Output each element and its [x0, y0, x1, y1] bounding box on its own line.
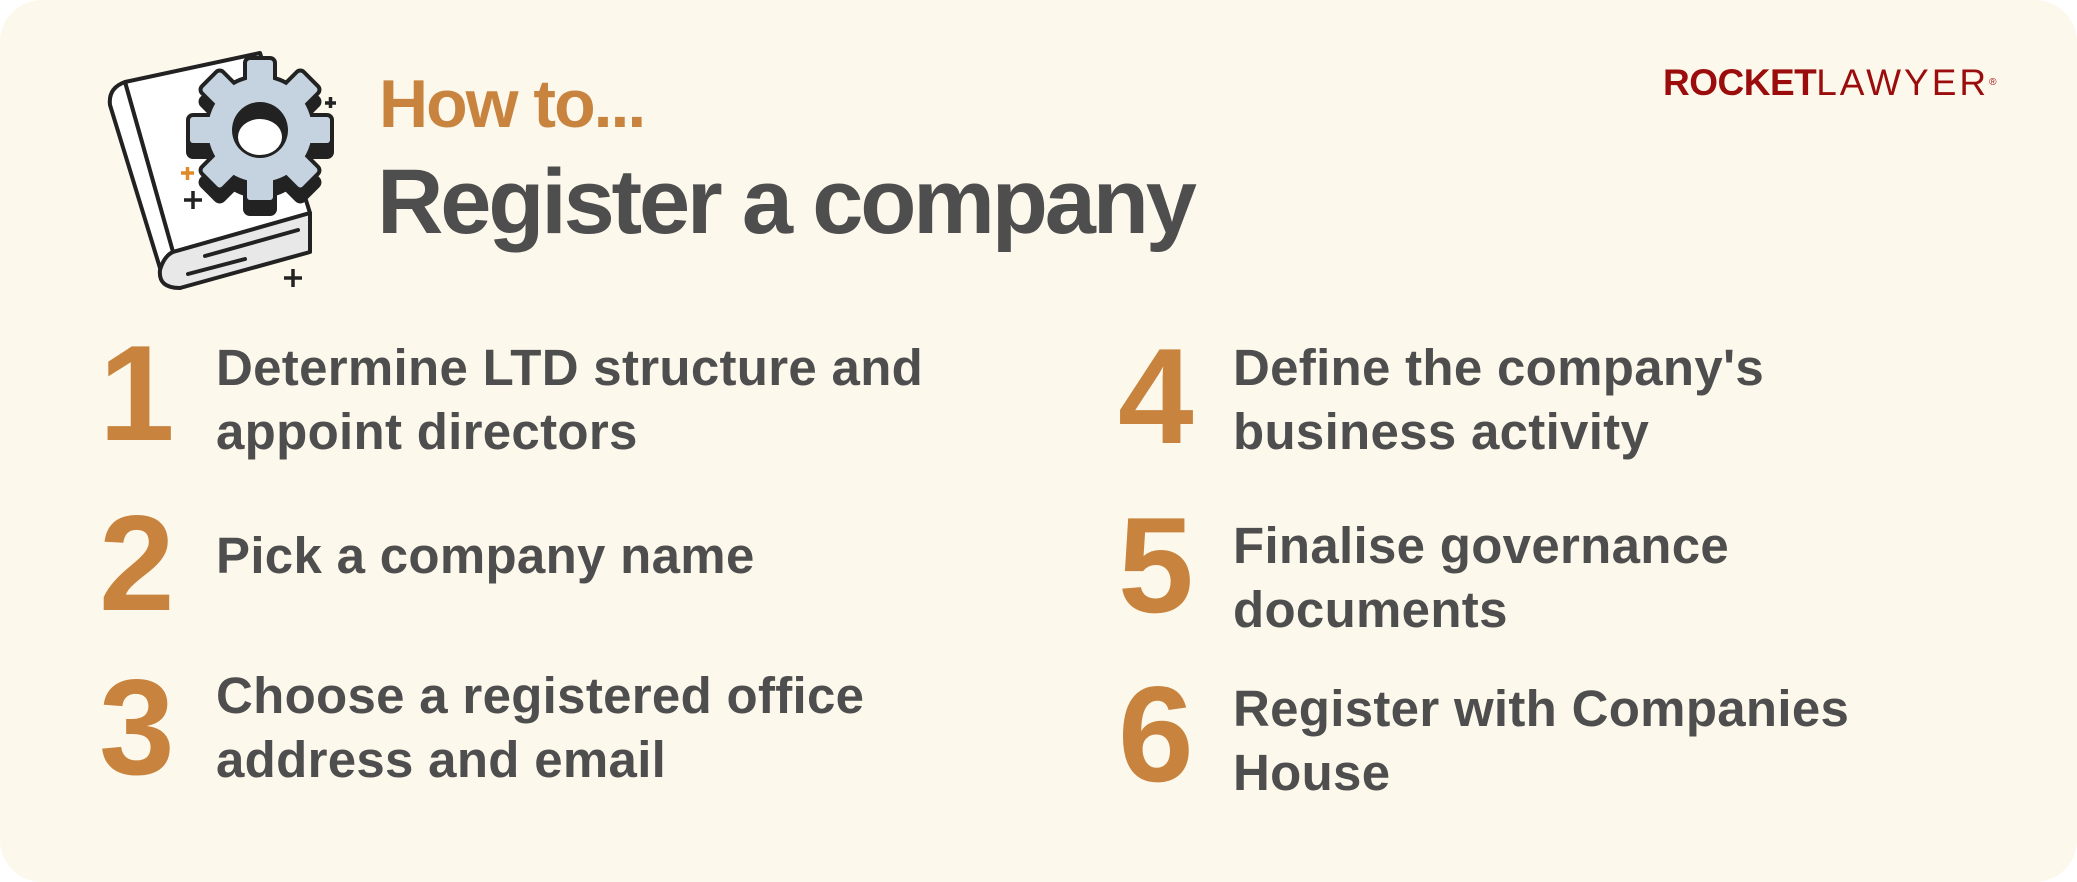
step 4: 4: [1118, 320, 1194, 472]
step 6: 6: [1118, 658, 1194, 810]
step 6: [1118, 658, 1849, 810]
step 5: [1118, 489, 1729, 641]
step 3: 3: [99, 651, 175, 803]
step 1: Determine LTD structure and: [216, 339, 923, 396]
step 6: House: [1233, 744, 1390, 801]
step 5: 5: [1118, 489, 1194, 641]
step 3: address and email: [216, 731, 666, 788]
step 4: Define the company's: [1233, 339, 1764, 396]
step 1: 1: [99, 317, 175, 469]
heading: How to...: How to...: [379, 66, 644, 142]
step 4: [1118, 320, 1764, 472]
title: Register a company: [377, 151, 1194, 253]
step 2: 2: [99, 487, 175, 639]
step 1: [99, 317, 923, 469]
step 2: [99, 487, 755, 639]
step 3: [99, 651, 864, 803]
step 1: appoint directors: [216, 403, 638, 460]
step 5: Finalise governance: [1233, 517, 1729, 574]
step 2: Pick a company name: [216, 527, 755, 584]
step 5: documents: [1233, 581, 1508, 638]
step 3: Choose a registered office: [216, 667, 864, 724]
icon: book with gear: [108, 51, 336, 290]
logo: ROCKETLAWYER®: [1663, 62, 1996, 103]
step 6: Register with Companies: [1233, 680, 1849, 737]
step 4: business activity: [1233, 403, 1649, 460]
